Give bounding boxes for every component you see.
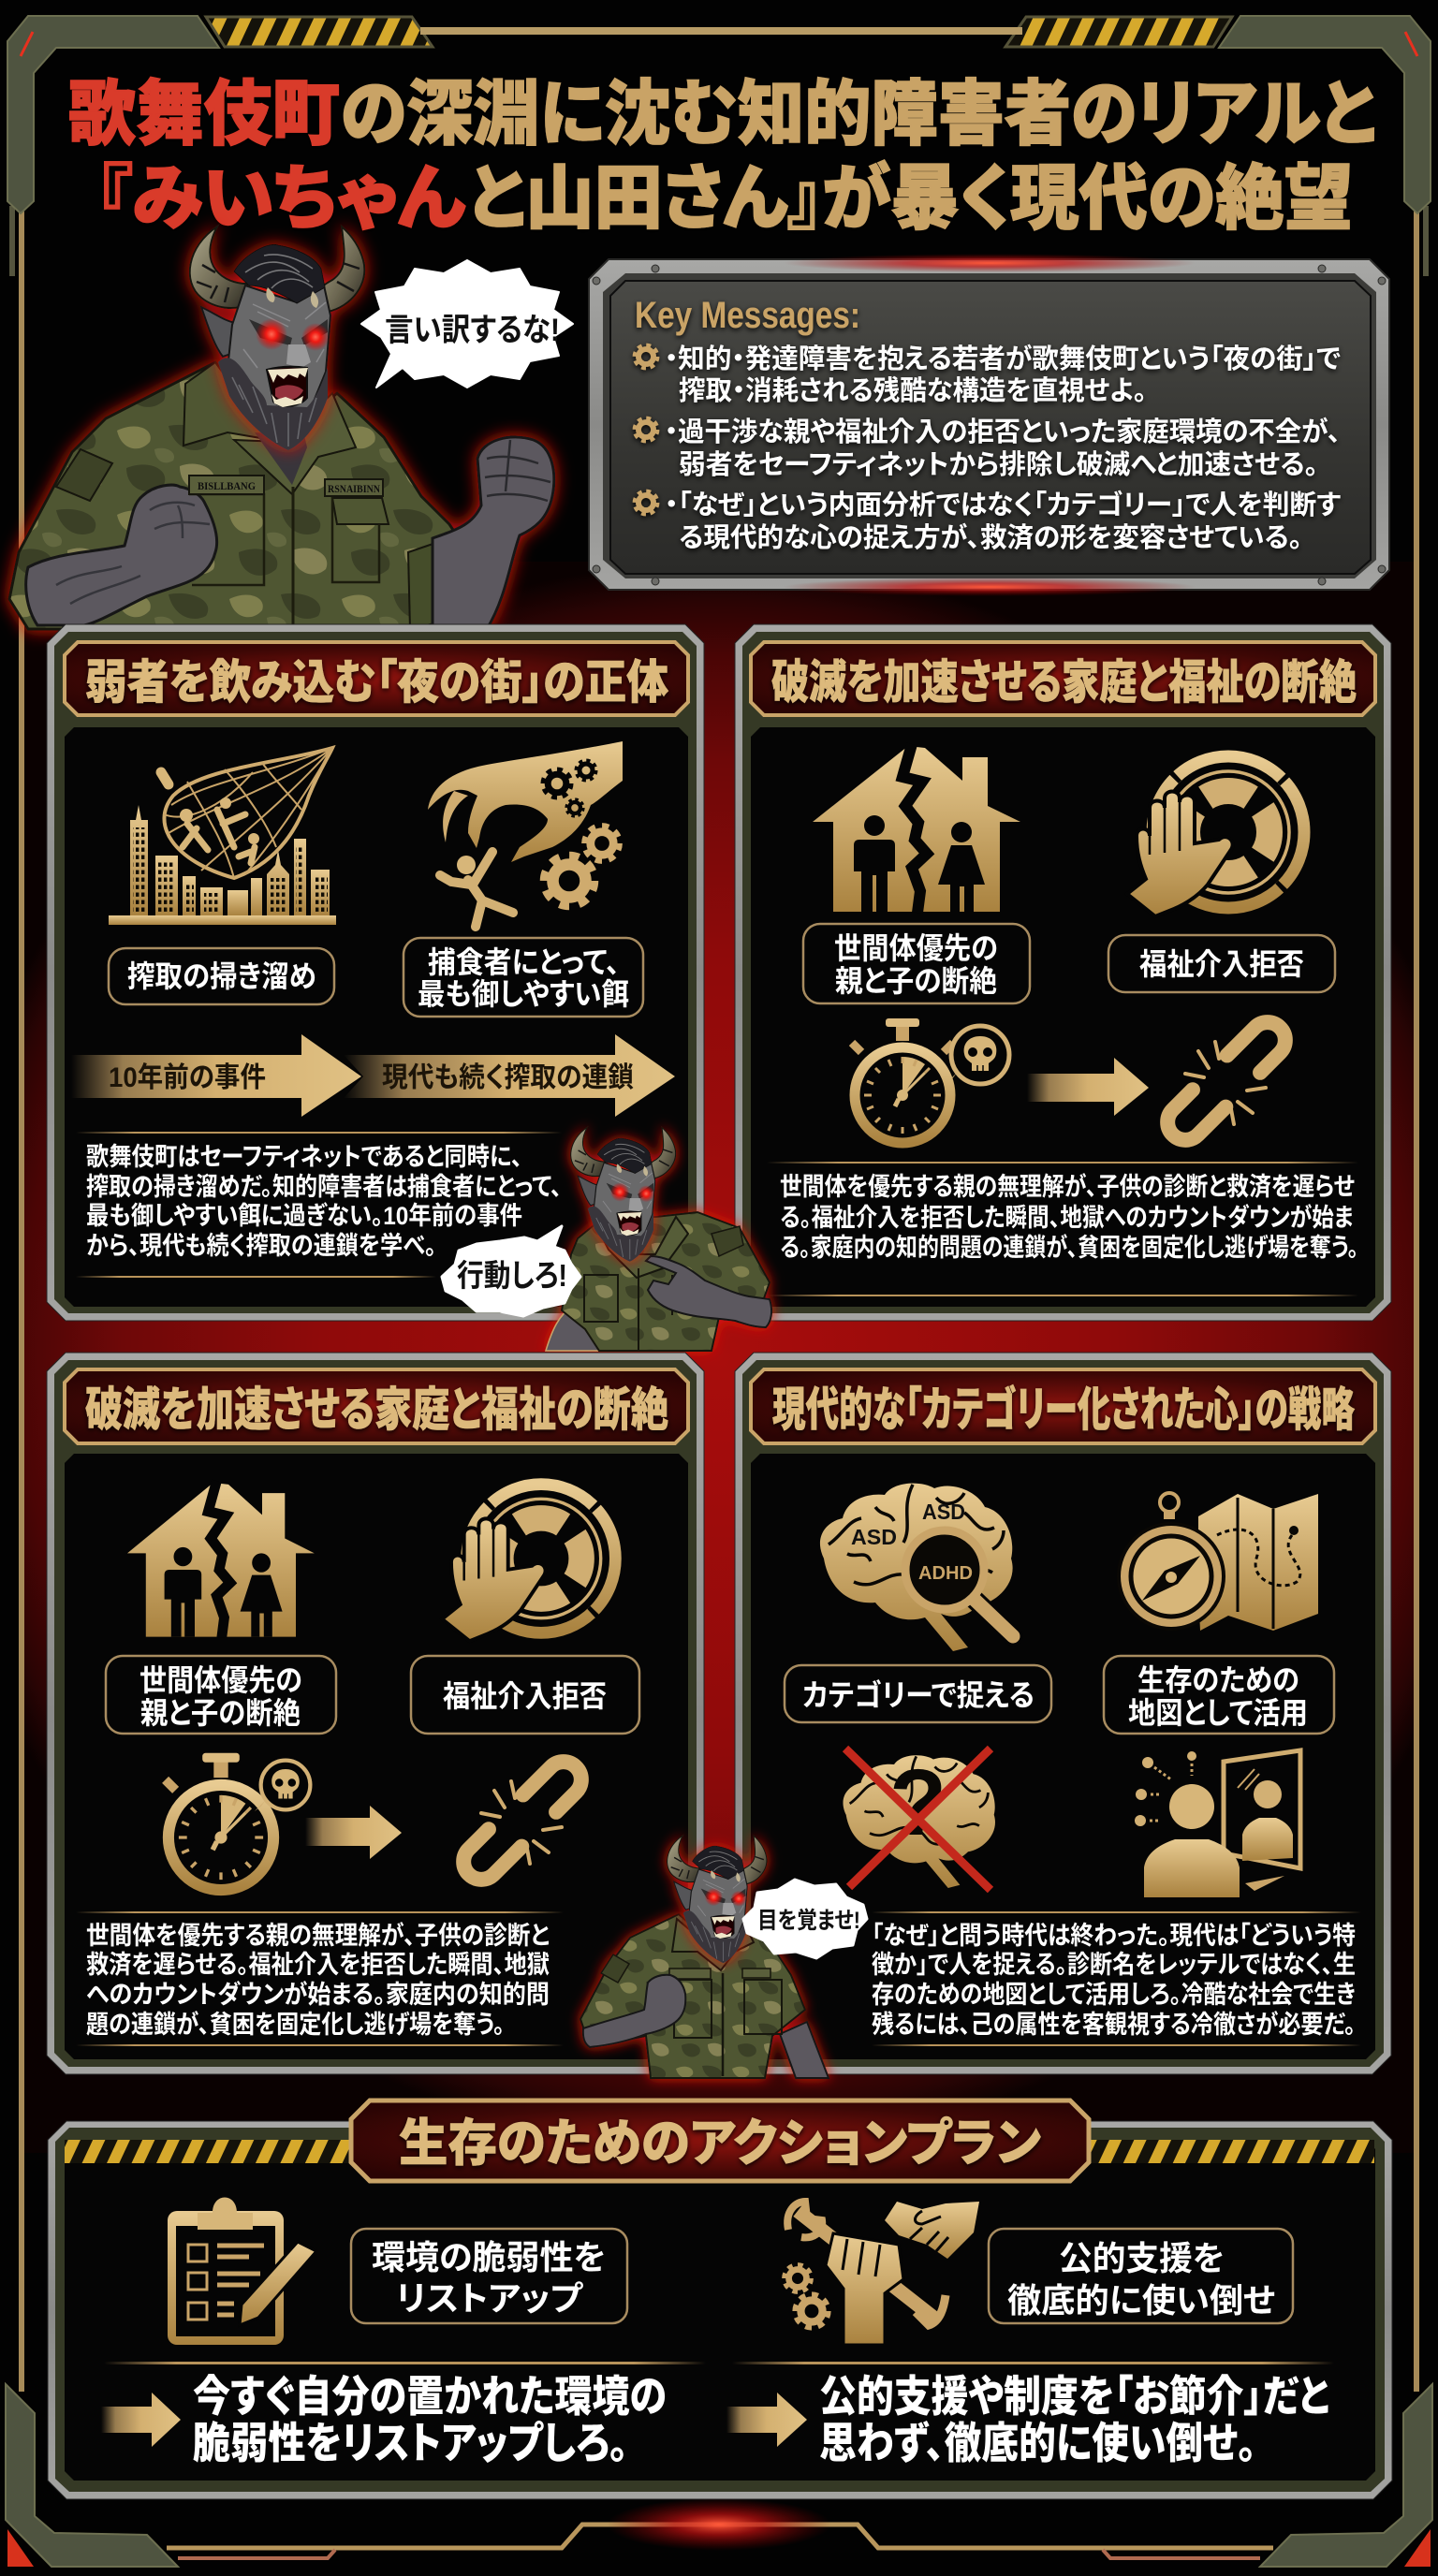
panel: family and welfare (repeat) xyxy=(47,1353,704,2074)
key message list: ・知的・発達障害を抱える若者が歌舞伎町という「夜の街」で xyxy=(665,343,1341,374)
body text xyxy=(86,1921,550,2039)
label: use public support: 徹底的に使い倒せ xyxy=(1007,2281,1275,2320)
frame: hazard strip left xyxy=(206,17,433,47)
speech bubble: act xyxy=(442,1226,580,1316)
hazard strip right xyxy=(1089,2140,1374,2163)
body text: 世間体を優先する親の無理解が、子供の診断と救済を遅らせ xyxy=(780,1172,1355,1201)
icon: broken chain xyxy=(1160,1015,1293,1148)
body text: 題の連鎖が、貧困を固定化し逃げ場を奪う。 xyxy=(86,2010,505,2039)
character: fist demon soldier xyxy=(580,1836,829,2078)
frame: bottom xyxy=(6,2384,1432,2567)
action plan heading xyxy=(351,2100,1089,2181)
body text: る。福祉介入を拒否した瞬間、地獄へのカウントダウンが始ま xyxy=(780,1203,1354,1232)
title: 『みいちゃん xyxy=(96,159,465,239)
body text xyxy=(872,1922,1356,2039)
panel heading: 破滅を加速させる家庭と福祉の断絶 xyxy=(85,1383,668,1436)
icon: fist, wrench and handshake xyxy=(785,2202,979,2345)
icon: brain with magnifier: ADHD xyxy=(918,1563,973,1584)
icon: brain with magnifier: ASD xyxy=(922,1500,965,1524)
arrow: ongoing chain: 現代も続く搾取の連鎖 xyxy=(382,1062,634,1093)
action text: right xyxy=(819,2372,1329,2467)
body text xyxy=(780,1172,1358,1262)
icon: broken house xyxy=(813,744,1020,913)
label: list vulnerabilities xyxy=(351,2229,627,2323)
frame: hazard strip right xyxy=(1005,17,1232,47)
icon: broken house xyxy=(127,1481,315,1638)
speech bubble: excuses xyxy=(361,260,573,388)
title: 歌舞伎町 xyxy=(68,75,340,154)
label: family rupture: 世間体優先の xyxy=(834,931,998,965)
icon: hand rejecting lifebuoy xyxy=(442,1484,616,1641)
key message list: る現代的な心の捉え方が、救済の形を変容させている。 xyxy=(679,521,1302,553)
label: exploitation xyxy=(109,948,334,1004)
panel: key messages xyxy=(589,254,1389,596)
frame: left side line xyxy=(19,211,24,2392)
label: easy prey: 最も御しやすい餌 xyxy=(418,977,629,1011)
frame: bottom-right plate xyxy=(1260,2384,1432,2567)
body text: 存のための地図として活用しろ。冷酷な社会で生き xyxy=(872,1981,1356,2009)
key message list xyxy=(635,343,1341,553)
soldier body xyxy=(580,1914,829,2078)
frame: top-right plate xyxy=(1219,16,1431,213)
body text: 最も御しやすい餌に過ぎない。10年前の事件 xyxy=(86,1201,522,1230)
body text: 歌舞伎町はセーフティネットであると同時に、 xyxy=(86,1143,522,1171)
action text: left: 今すぐ自分の置かれた環境の xyxy=(193,2372,667,2421)
label: welfare refusal xyxy=(1108,935,1335,992)
panel heading xyxy=(751,1369,1375,1443)
label: list vulnerabilities: リストアップ xyxy=(396,2279,584,2318)
label: family rupture: 世間体優先の xyxy=(139,1663,302,1697)
action text: left xyxy=(193,2372,667,2467)
label: easy prey: 捕食者にとって、 xyxy=(428,945,620,979)
label: survival map: 地図として活用 xyxy=(1128,1696,1308,1730)
key message list: 搾取・消耗される残酷な構造を直視せよ。 xyxy=(679,375,1147,406)
icon: brain with magnifier xyxy=(820,1484,1013,1651)
panel: categorized mind xyxy=(735,1353,1391,2074)
body text: 残るには、己の属性を客観視する冷徹さが必要だ。 xyxy=(872,2010,1356,2039)
speech bubble: wake up: 目を覚ませ! xyxy=(757,1908,860,1934)
speech bubble: wake up xyxy=(743,1880,867,1958)
label: welfare refusal xyxy=(411,1656,639,1734)
character: shouting demon soldier xyxy=(9,227,554,629)
speech bubble: excuses: 言い訳するな! xyxy=(385,313,560,348)
label: survival map: 生存のための xyxy=(1137,1663,1299,1697)
action plan heading: 生存のためのアクションプラン xyxy=(399,2115,1041,2172)
arrow: left action xyxy=(101,2393,181,2447)
label: category xyxy=(785,1665,1051,1722)
label: family rupture xyxy=(803,924,1030,1003)
speech bubble: act: 行動しろ! xyxy=(457,1258,567,1293)
label: use public support: 公的支援を xyxy=(1059,2239,1225,2277)
label: welfare refusal: 福祉介入拒否 xyxy=(443,1679,607,1713)
key message list: ・「なぜ」という内面分析ではなく「カテゴリー」で人を判断す xyxy=(665,489,1341,520)
key message list: ・過干渉な親や福祉介入の拒否といった家庭環境の不全が、 xyxy=(665,416,1341,447)
action text: left: 脆弱性をリストアップしろ。 xyxy=(193,2419,628,2467)
body text: 世間体を優先する親の無理解が、子供の診断と xyxy=(86,1921,550,1950)
panel: night town xyxy=(47,624,704,1321)
icon: brain crossed out: ? xyxy=(889,1750,946,1855)
soldier head xyxy=(668,1836,767,1963)
label: survival map xyxy=(1104,1656,1334,1734)
soldier body: RSNAIBINN xyxy=(328,482,380,495)
arrow: right action xyxy=(726,2393,807,2447)
red glow background field xyxy=(24,562,1414,2153)
icon: brain crossed out xyxy=(843,1749,995,1890)
icon: claw hand and gears xyxy=(428,741,623,927)
panel heading xyxy=(751,642,1375,715)
arrow: 10 years ago: 10年前の事件 xyxy=(109,1062,266,1093)
soldier head xyxy=(571,1127,676,1262)
icon: clipboard xyxy=(168,2198,316,2345)
character: pointing demon soldier xyxy=(546,1127,771,1351)
label: easy prey xyxy=(404,938,643,1017)
label: family rupture: 親と子の断絶 xyxy=(140,1696,301,1730)
icon: compass and map xyxy=(1119,1493,1318,1631)
soldier head xyxy=(190,227,364,450)
panel heading xyxy=(65,642,688,715)
body text: 救済を遅らせる。福祉介入を拒否した瞬間、地獄 xyxy=(86,1951,550,1979)
label: use public support xyxy=(989,2229,1293,2323)
panel: action plan xyxy=(48,2100,1392,2499)
frame: right side line xyxy=(1414,211,1419,2392)
icon: broken chain xyxy=(456,1754,589,1887)
frame: top-left plate xyxy=(7,16,219,213)
body text xyxy=(86,1143,562,1260)
panel heading: 弱者を飲み込む「夜の街」の正体 xyxy=(85,656,668,709)
soldier body xyxy=(546,1212,771,1351)
label: family rupture xyxy=(106,1656,336,1734)
title: と山田さん』が暴く現代の絶望 xyxy=(468,159,1353,239)
soldier body: BISLLBANG xyxy=(198,479,256,492)
label: list vulnerabilities: 環境の脆弱性を xyxy=(372,2238,606,2276)
icon: person at mirror xyxy=(1135,1750,1300,1897)
key messages heading: Key Messages: xyxy=(635,295,860,336)
icon: brain with magnifier: ASD xyxy=(851,1525,897,1549)
panel heading xyxy=(65,1369,688,1443)
body text: 「なぜ」と問う時代は終わった。現代は「どういう特 xyxy=(872,1922,1356,1950)
body text: 搾取の掃き溜めだ。知的障害者は捕食者にとって、 xyxy=(86,1173,562,1201)
arrow: ongoing chain xyxy=(344,1034,675,1117)
icon: stopwatch with skull xyxy=(166,1753,310,1890)
icon: stopwatch with skull xyxy=(852,1018,1009,1143)
body text: 徴か」で人を捉える。診断名をレッテルではなく、生 xyxy=(872,1951,1356,1979)
action text: right: 思わず、徹底的に使い倒せ。 xyxy=(819,2419,1256,2467)
arrow: 10 years ago xyxy=(71,1034,361,1117)
arrow xyxy=(1027,1058,1149,1116)
arrow xyxy=(305,1806,402,1859)
soldier body xyxy=(9,362,554,629)
frame: bottom-left plate xyxy=(6,2384,178,2567)
label: welfare refusal: 福祉介入拒否 xyxy=(1139,947,1304,981)
label: family rupture: 親と子の断絶 xyxy=(835,964,997,998)
body text: へのカウントダウンが始まる。家庭内の知的問 xyxy=(86,1980,550,2009)
title: の深淵に沈む知的障害者のリアルと xyxy=(341,75,1376,154)
title xyxy=(68,75,1376,239)
body text: から、現代も続く搾取の連鎖を学べ。 xyxy=(86,1232,436,1260)
icon: net over city xyxy=(109,748,336,925)
label: category: カテゴリーで捉える xyxy=(802,1678,1034,1712)
icon: hand rejecting lifebuoy xyxy=(1127,755,1305,916)
label: exploitation: 搾取の掃き溜め xyxy=(127,959,316,993)
action text: right: 公的支援や制度を「お節介」だと xyxy=(819,2372,1329,2421)
hazard strip left xyxy=(65,2140,351,2163)
key message list: 弱者をセーフティネットから排除し破滅へと加速させる。 xyxy=(679,449,1318,480)
panel: family and welfare xyxy=(735,624,1391,1321)
